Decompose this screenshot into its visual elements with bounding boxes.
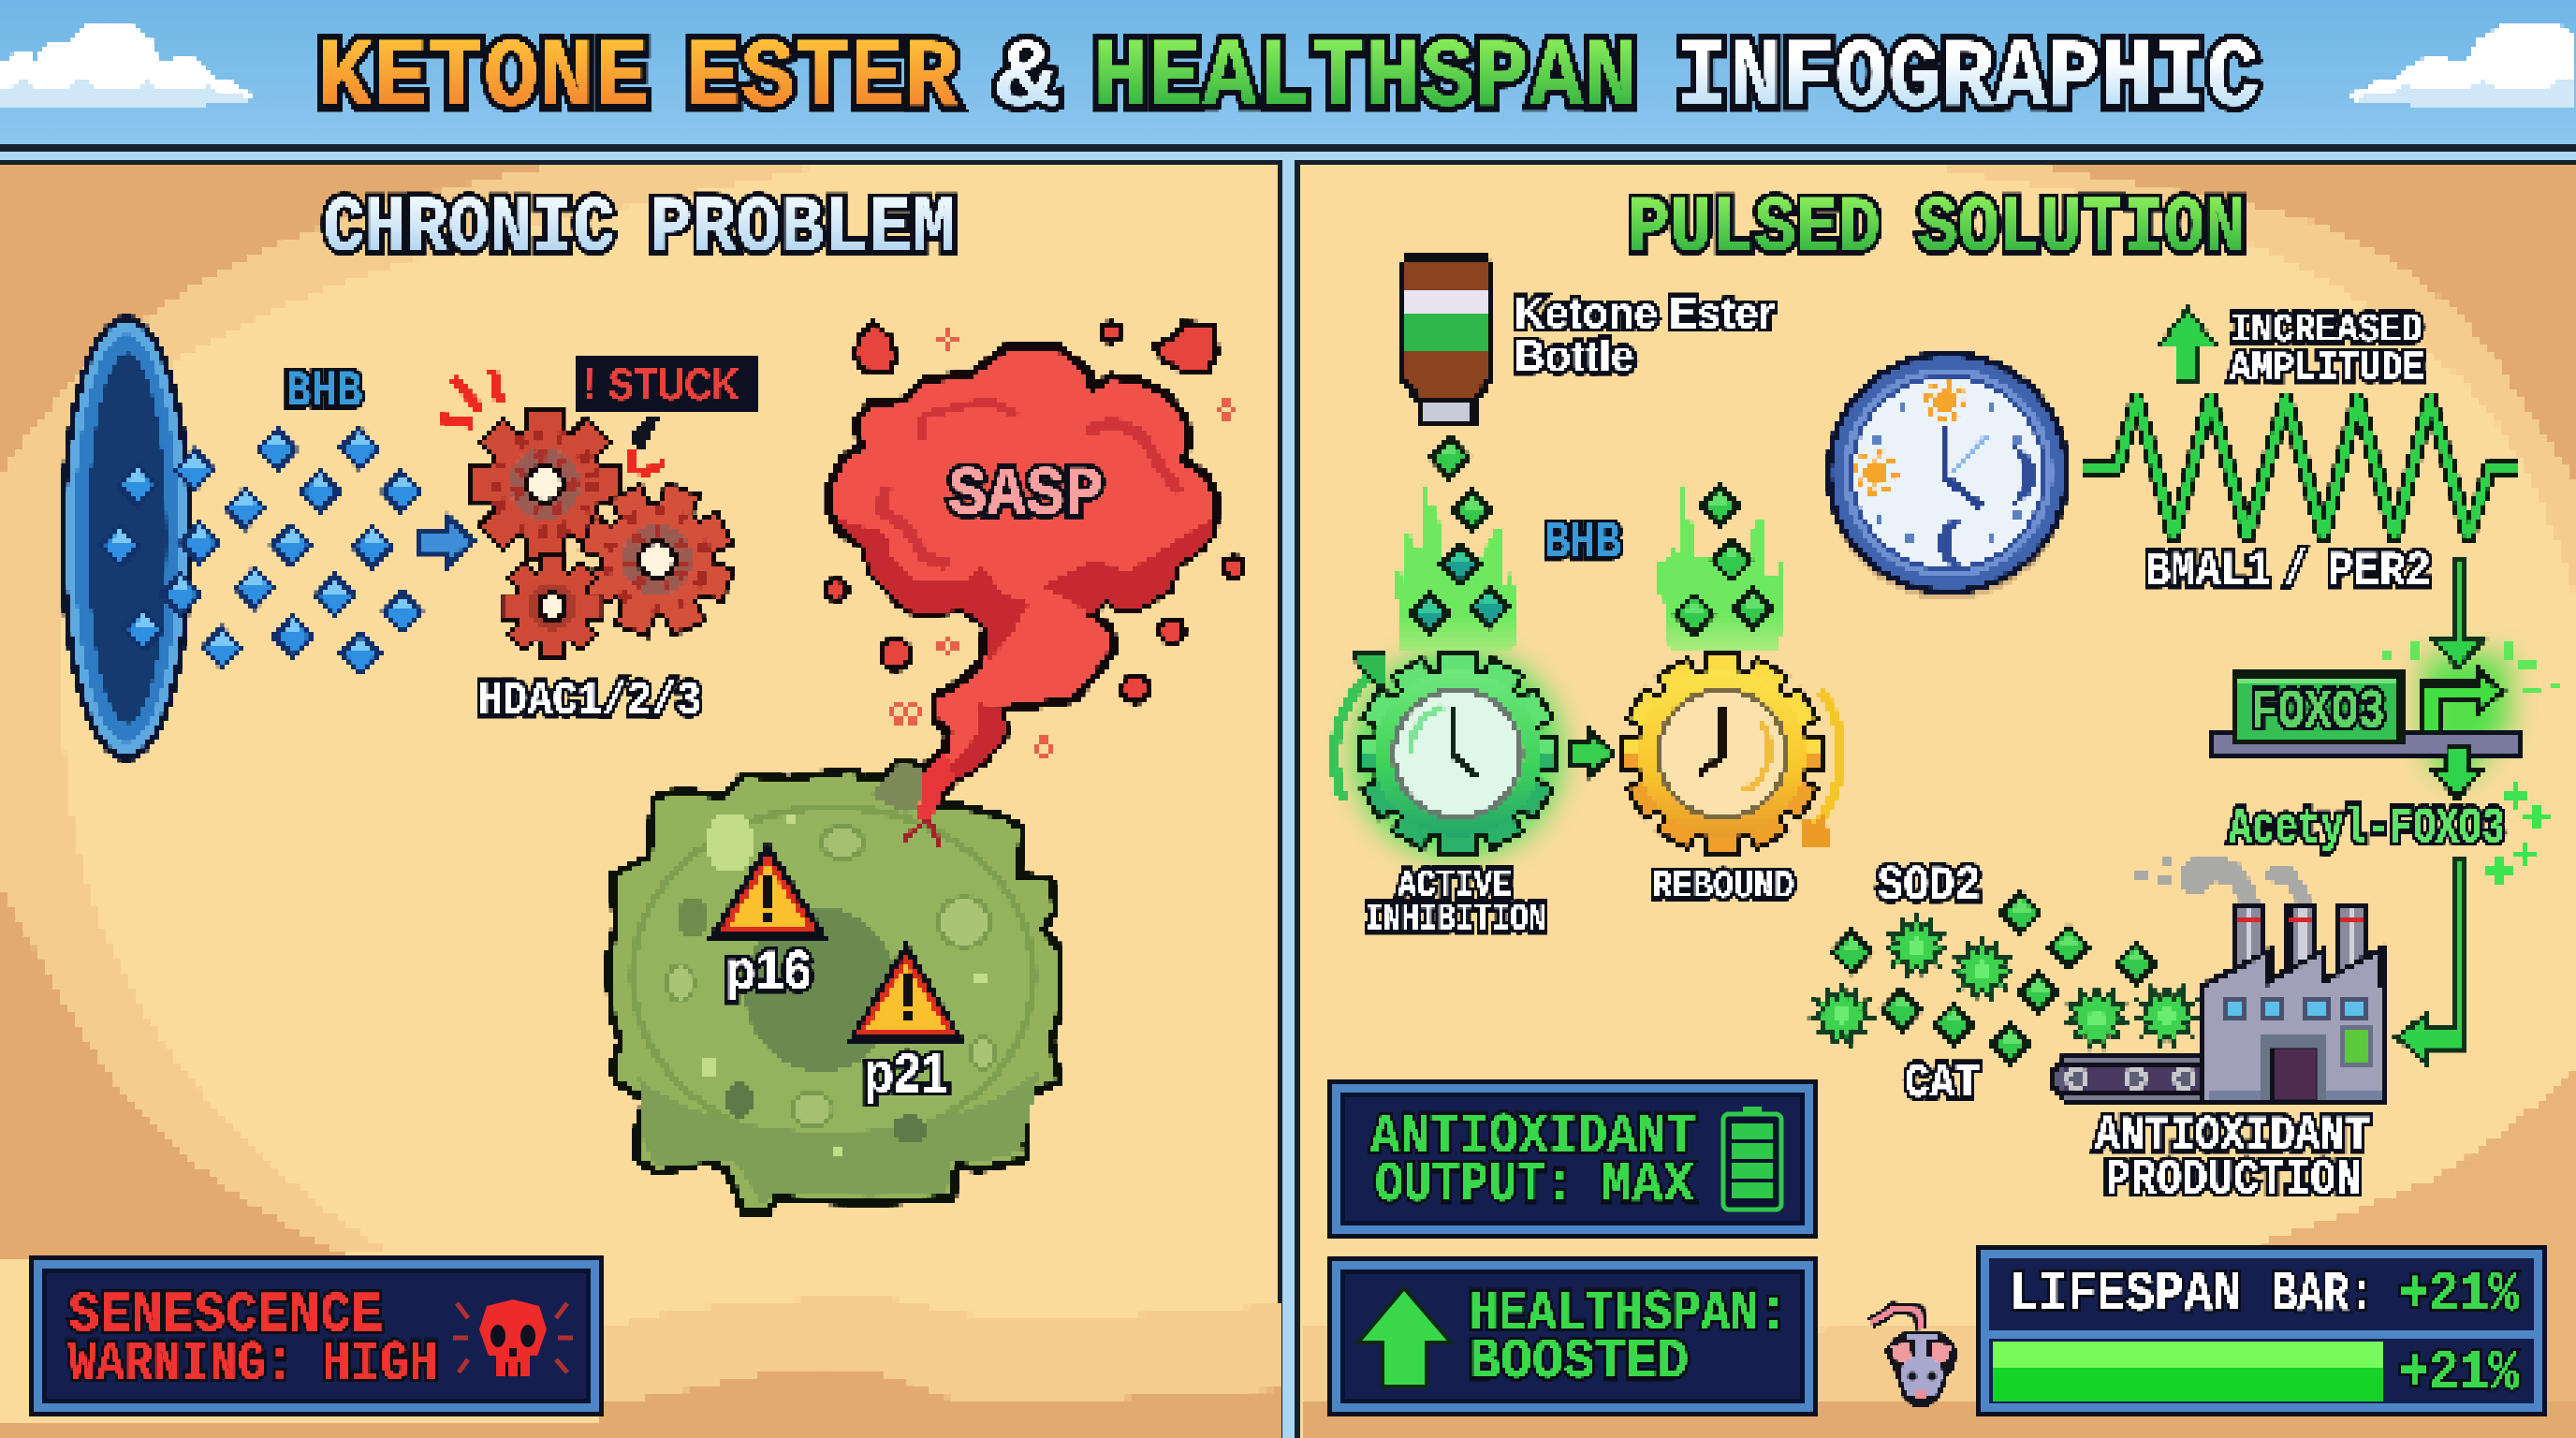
main title: HEALTHSPAN <box>1093 24 1638 135</box>
curved arrow: active inhibition <box>1335 653 1385 800</box>
right panel text labels: REBOUND <box>1652 864 1794 909</box>
conveyor belt <box>2050 1051 2202 1105</box>
cell membrane portal with BHB crystals <box>63 318 218 758</box>
main title: INFOGRAPHIC <box>1676 24 2260 135</box>
arrow between gears <box>1569 729 1614 777</box>
senescence warning text: HIGH <box>322 1333 438 1397</box>
arrow to factory <box>2397 859 2466 1063</box>
lifespan bar heading: +21% <box>2399 1264 2520 1328</box>
smoke <box>2136 855 2310 902</box>
SASP sparks <box>887 329 1237 759</box>
BHB crystal swarm <box>203 429 421 673</box>
left panel text labels <box>285 358 1104 1104</box>
antioxidant output text: ANTIOXIDANT <box>1370 1106 1696 1169</box>
right panel text labels: BHB <box>1544 515 1621 572</box>
arrow to acetyl-FOXO3 <box>2434 746 2481 799</box>
main title: & <box>996 24 1058 135</box>
right panel text labels: AMPLITUDE <box>2230 345 2424 392</box>
antioxidant output text <box>1370 1106 1696 1218</box>
curved arrow: rebound <box>1800 690 1841 845</box>
main title <box>317 24 2260 135</box>
status box: lifespan bar <box>1976 1245 2547 1416</box>
lifespan bar heading <box>2010 1264 2520 1328</box>
panel heading: pulsed solution: SOLUTION <box>1917 185 2246 274</box>
healthspan text: BOOSTED <box>1470 1331 1689 1395</box>
icon: green up arrow <box>1358 1288 1451 1387</box>
left panel text labels: HDAC1/2/3 <box>478 675 701 728</box>
lifespan bar heading: BAR: <box>2272 1264 2375 1328</box>
circadian wave BMAL1 PER2 <box>2085 399 2516 536</box>
left panel sand background <box>0 165 1278 1438</box>
left panel text labels: p21 <box>864 1043 948 1104</box>
panel: chronic problem <box>0 160 1282 1438</box>
divider strip <box>1282 152 1295 1438</box>
lab mouse <box>1870 1308 1958 1406</box>
main title: ESTER <box>686 24 959 135</box>
right panel illustrations <box>1335 257 2558 1105</box>
senescence warning text: SENESCENCE <box>68 1284 383 1348</box>
yellow gear clock <box>1625 656 1820 851</box>
right panel text labels: INCREASED <box>2230 307 2422 354</box>
status box: senescence warning <box>29 1255 604 1416</box>
left panel text labels: SASP <box>948 457 1104 536</box>
progress bar <box>1993 1342 2383 1401</box>
sparkles <box>2487 784 2549 883</box>
senescence warning text: WARNING: <box>68 1333 294 1397</box>
warning triangle p21 <box>856 950 957 1037</box>
panel heading: chronic problem: CHRONIC <box>323 185 615 274</box>
status box: antioxidant output <box>1327 1079 1818 1239</box>
panel heading: pulsed solution: PULSED <box>1628 185 1881 274</box>
SASP explosion cloud <box>830 345 1217 823</box>
panel: pulsed solution <box>1282 152 2576 1438</box>
ketone ester bottle <box>1401 257 1492 422</box>
right panel text labels: / <box>2284 544 2306 599</box>
strain marks and pointer <box>440 372 666 479</box>
right panel text labels: SOD2 <box>1878 858 1981 914</box>
arrow to gears <box>420 517 474 565</box>
STUCK label box <box>574 354 756 413</box>
right panel text labels: INHIBITION <box>1365 897 1546 942</box>
senescent cell <box>607 750 1060 1212</box>
icon: full battery <box>1723 1107 1781 1210</box>
right panel text labels: PRODUCTION <box>2105 1152 2362 1208</box>
right panel text labels: CAT <box>1905 1056 1980 1111</box>
stuck HDAC gears <box>472 411 751 655</box>
right panel text labels: ACTIVE <box>1398 863 1512 908</box>
healthspan text <box>1470 1283 1788 1395</box>
progress bar value: +21% <box>2399 1343 2520 1406</box>
antioxidant output text: MAX <box>1601 1154 1694 1218</box>
panel heading: chronic problem: PROBLEM <box>649 185 956 274</box>
FOXO3 gene box on platform <box>2213 674 2521 755</box>
falling BHB crystals <box>1411 438 1772 634</box>
green gear clock <box>1360 656 1555 851</box>
transcription arrow <box>2423 669 2502 732</box>
right panel sand background <box>1300 165 2576 1438</box>
activation rays around FOXO3 <box>2384 639 2558 692</box>
panel heading: chronic problem <box>323 185 956 274</box>
right panel text labels: BMAL1 <box>2145 544 2271 599</box>
main title: KETONE <box>317 24 650 135</box>
left panel text labels: ! <box>582 358 595 410</box>
SASP droplets <box>827 323 1244 702</box>
left panel text labels: BHB <box>285 364 362 421</box>
arrow to FOXO3 <box>2434 560 2483 668</box>
antioxidant factory <box>2203 904 2386 1103</box>
left panel text labels: p16 <box>725 940 812 1001</box>
panel heading: pulsed solution <box>1628 185 2246 274</box>
right panel text labels <box>1365 288 2505 1208</box>
right panel text labels: Bottle <box>1515 331 1634 380</box>
antioxidant output text: OUTPUT: <box>1375 1154 1573 1218</box>
icon: red skull <box>453 1299 573 1376</box>
clouds <box>0 22 2576 107</box>
right panel text labels: FOXO3 <box>2251 682 2385 743</box>
green BHB flames <box>1395 489 1781 653</box>
right panel text labels: Ketone Ester <box>1515 288 1775 337</box>
warning triangle p16 <box>716 850 820 934</box>
senescence warning text <box>68 1284 438 1397</box>
status box: healthspan boosted <box>1327 1256 1818 1416</box>
antioxidant enzymes <box>1813 893 2196 1064</box>
right panel text labels: PER2 <box>2328 544 2431 599</box>
lifespan bar heading: LIFESPAN <box>2010 1264 2242 1328</box>
left panel illustrations <box>63 318 1244 1212</box>
day-night clock <box>1828 354 2068 600</box>
right panel glows <box>1353 649 2509 858</box>
header banner <box>0 0 2576 161</box>
left panel text labels: STUCK <box>608 360 739 410</box>
right panel text labels: ANTIOXIDANT <box>2095 1108 2370 1164</box>
increased amplitude up arrow <box>2159 309 2217 380</box>
healthspan text: HEALTHSPAN: <box>1470 1283 1788 1346</box>
